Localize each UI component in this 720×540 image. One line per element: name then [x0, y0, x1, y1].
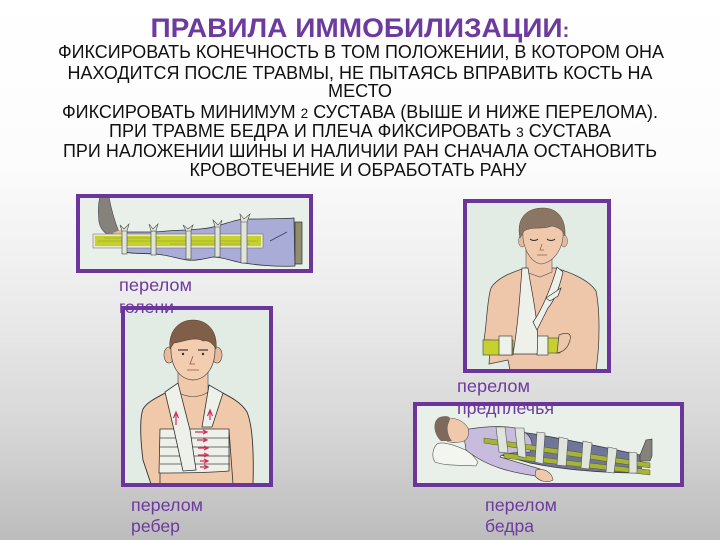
femur splints	[484, 438, 650, 475]
caption: rib fracture: перелом	[131, 495, 203, 515]
panel: forearm fracture illustration	[466, 202, 608, 370]
text block: rules	[58, 41, 665, 180]
bandages	[496, 427, 637, 473]
foot	[640, 439, 652, 461]
legs	[490, 429, 642, 473]
arrows	[174, 410, 212, 469]
caption: lower leg fracture: перелом	[119, 275, 192, 295]
caption: femur fracture: бедра	[485, 516, 534, 536]
icon: leg splint	[93, 234, 263, 248]
text block: rules: ПРИ НАЛОЖЕНИИ ШИНЫ И НАЛИЧИИ РАН СНАЧАЛА ОСТАНОВИТЬ	[63, 140, 657, 161]
hand	[535, 469, 553, 482]
sling	[513, 267, 563, 354]
text block: rules: НАХОДИТСЯ ПОСЛЕ ТРАВМЫ, НЕ ПЫТАЯСЬ ВПРАВИТЬ КОСТЬ НА	[68, 62, 653, 83]
caption: lower leg fracture: голени	[119, 297, 174, 317]
torso and arm	[463, 427, 540, 476]
neck	[178, 370, 208, 396]
head	[434, 416, 469, 443]
torso	[484, 268, 599, 370]
caption: femur fracture	[485, 495, 557, 536]
icon: shoe	[98, 197, 119, 236]
text block: rules: ПРИ ТРАВМЕ БЕДРА И ПЛЕЧА ФИКСИРОВАТЬ 3 СУСТАВА	[109, 120, 612, 141]
caption: femur fracture: перелом	[485, 495, 557, 515]
forearm splint	[483, 333, 570, 355]
head	[164, 320, 222, 380]
caption: rib fracture: ребер	[131, 516, 180, 536]
trouser leg	[118, 218, 295, 266]
title: ПРАВИЛА ИММОБИЛИЗАЦИИ :	[150, 13, 570, 43]
caption: forearm fracture: предплечья	[457, 398, 554, 418]
caption: forearm fracture: перелом	[457, 376, 530, 396]
text block: rules: ФИКСИРОВАТЬ КОНЕЧНОСТЬ В ТОМ ПОЛОЖЕНИИ, В КОТОРОМ ОНА	[58, 41, 665, 62]
frames around illustrations	[78, 196, 682, 485]
pillow	[433, 443, 478, 466]
neck	[526, 248, 552, 277]
torso	[141, 386, 253, 484]
chest bandage	[159, 429, 230, 473]
belt	[295, 222, 302, 264]
caption: lower leg fracture	[119, 275, 192, 317]
splint ties	[120, 214, 250, 263]
text block: rules: КРОВОТЕЧЕНИЕ И ОБРАБОТАТЬ РАНУ	[190, 159, 527, 180]
panel: lower leg fracture illustration	[79, 197, 310, 270]
panel: femur fracture illustration	[416, 405, 681, 484]
text block: rules: ФИКСИРОВАТЬ МИНИМУМ 2 СУСТАВА (ВЫШЕ И НИЖЕ ПЕРЕЛОМА).	[62, 101, 658, 122]
head	[518, 208, 568, 264]
caption: forearm fracture	[457, 376, 554, 418]
panel: rib fracture illustration	[124, 309, 270, 484]
text block: rules: МЕСТО	[328, 80, 392, 101]
shoulder straps	[165, 383, 223, 471]
caption: rib fracture	[131, 495, 203, 536]
